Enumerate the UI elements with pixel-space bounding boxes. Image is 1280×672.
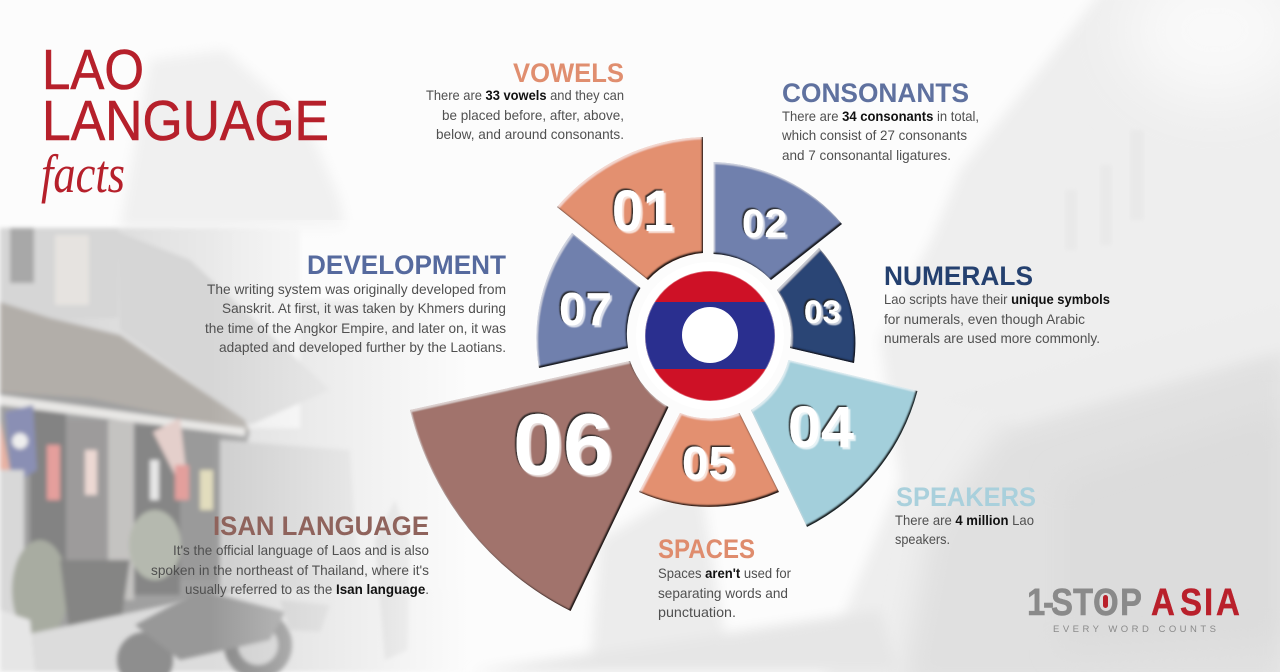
block: vowels: VOWELS (513, 58, 624, 88)
segment 06 (410, 361, 668, 611)
segment 05 (639, 413, 779, 507)
block: vowels: be placed before, after, above, (442, 107, 624, 123)
block: spaces: Spaces aren't used for (658, 565, 791, 581)
block: isan language: ISAN LANGUAGE (213, 511, 429, 541)
block: numerals: Lao scripts have their unique symbols (884, 291, 1110, 307)
block: development: DEVELOPMENT (307, 250, 506, 280)
segment 03 (777, 248, 855, 363)
segment 02: 02 (742, 202, 787, 246)
block: speakers: speakers. (895, 531, 950, 547)
block: spaces: punctuation. (658, 604, 736, 620)
block: numerals: for numerals, even though Arabic (884, 311, 1085, 327)
logo: 1-Stop Asia (1027, 582, 1240, 635)
block: isan language (151, 511, 429, 597)
segment 07 (536, 233, 640, 368)
title: LANGUAGE (42, 89, 329, 153)
block: spaces (658, 534, 791, 620)
block: development: The writing system was originally developed from (207, 281, 506, 297)
block: isan language: It's the official language of Laos and is also (173, 542, 429, 558)
block: speakers (895, 482, 1036, 547)
logo: 1-Stop Asia: EVERY WORD COUNTS (1053, 624, 1216, 635)
block: speakers: There are 4 million Lao (895, 512, 1034, 528)
icon: Laos flag (645, 271, 775, 401)
fade of photo to the centre (210, 220, 510, 672)
segment 05: 05 (682, 437, 735, 489)
block: vowels: There are 33 vowels and they can (426, 87, 624, 103)
block: development: the time of the Angkor Empire, and later on, it was (205, 320, 506, 336)
segment 04 (751, 360, 918, 527)
segment 04: 04 (788, 395, 854, 460)
block: development: Sanskrit. At first, it was taken by Khmers during (222, 300, 506, 316)
title (41, 38, 329, 204)
faint tree top left (120, 50, 345, 228)
title: facts (41, 144, 125, 204)
block: consonants: which consist of 27 consonants (781, 127, 967, 143)
block: numerals: NUMERALS (884, 261, 1033, 291)
block: numerals: numerals are used more commonly. (884, 330, 1100, 346)
title: LAO (42, 38, 144, 102)
left photo (0, 228, 500, 672)
block: consonants: and 7 consonantal ligatures. (782, 147, 951, 163)
segment 07: 07 (559, 283, 612, 335)
segment 06: 06 (513, 397, 613, 493)
block: consonants: CONSONANTS (782, 78, 969, 108)
segment 01: 01 (612, 179, 674, 244)
segment 01 (557, 137, 703, 280)
logo: 1-Stop Asia: 1-STOP (1027, 582, 1142, 624)
block: consonants: There are 34 consonants in total, (782, 108, 979, 124)
block: development: adapted and developed further by the Laotians. (219, 339, 506, 355)
motorbike silhouette (117, 500, 410, 672)
logo: 1-Stop Asia: ASIA (1151, 582, 1240, 624)
block: development (205, 250, 506, 355)
block: speakers: SPEAKERS (896, 482, 1036, 512)
block: spaces: SPACES (658, 534, 755, 564)
block: consonants (781, 78, 979, 163)
block: isan language: spoken in the northeast of Thailand, where it's (151, 562, 429, 578)
right building (820, 0, 1280, 672)
block: vowels (426, 58, 624, 142)
block: isan language: usually referred to as the Isan language. (185, 581, 429, 597)
segment 02 (714, 162, 842, 280)
block: vowels: below, and around consonants. (436, 126, 624, 142)
segment 03: 03 (804, 294, 841, 330)
block: spaces: separating words and (658, 585, 788, 601)
block: numerals (884, 261, 1110, 346)
centre ground tones (470, 480, 900, 672)
pie diagram (410, 137, 918, 611)
